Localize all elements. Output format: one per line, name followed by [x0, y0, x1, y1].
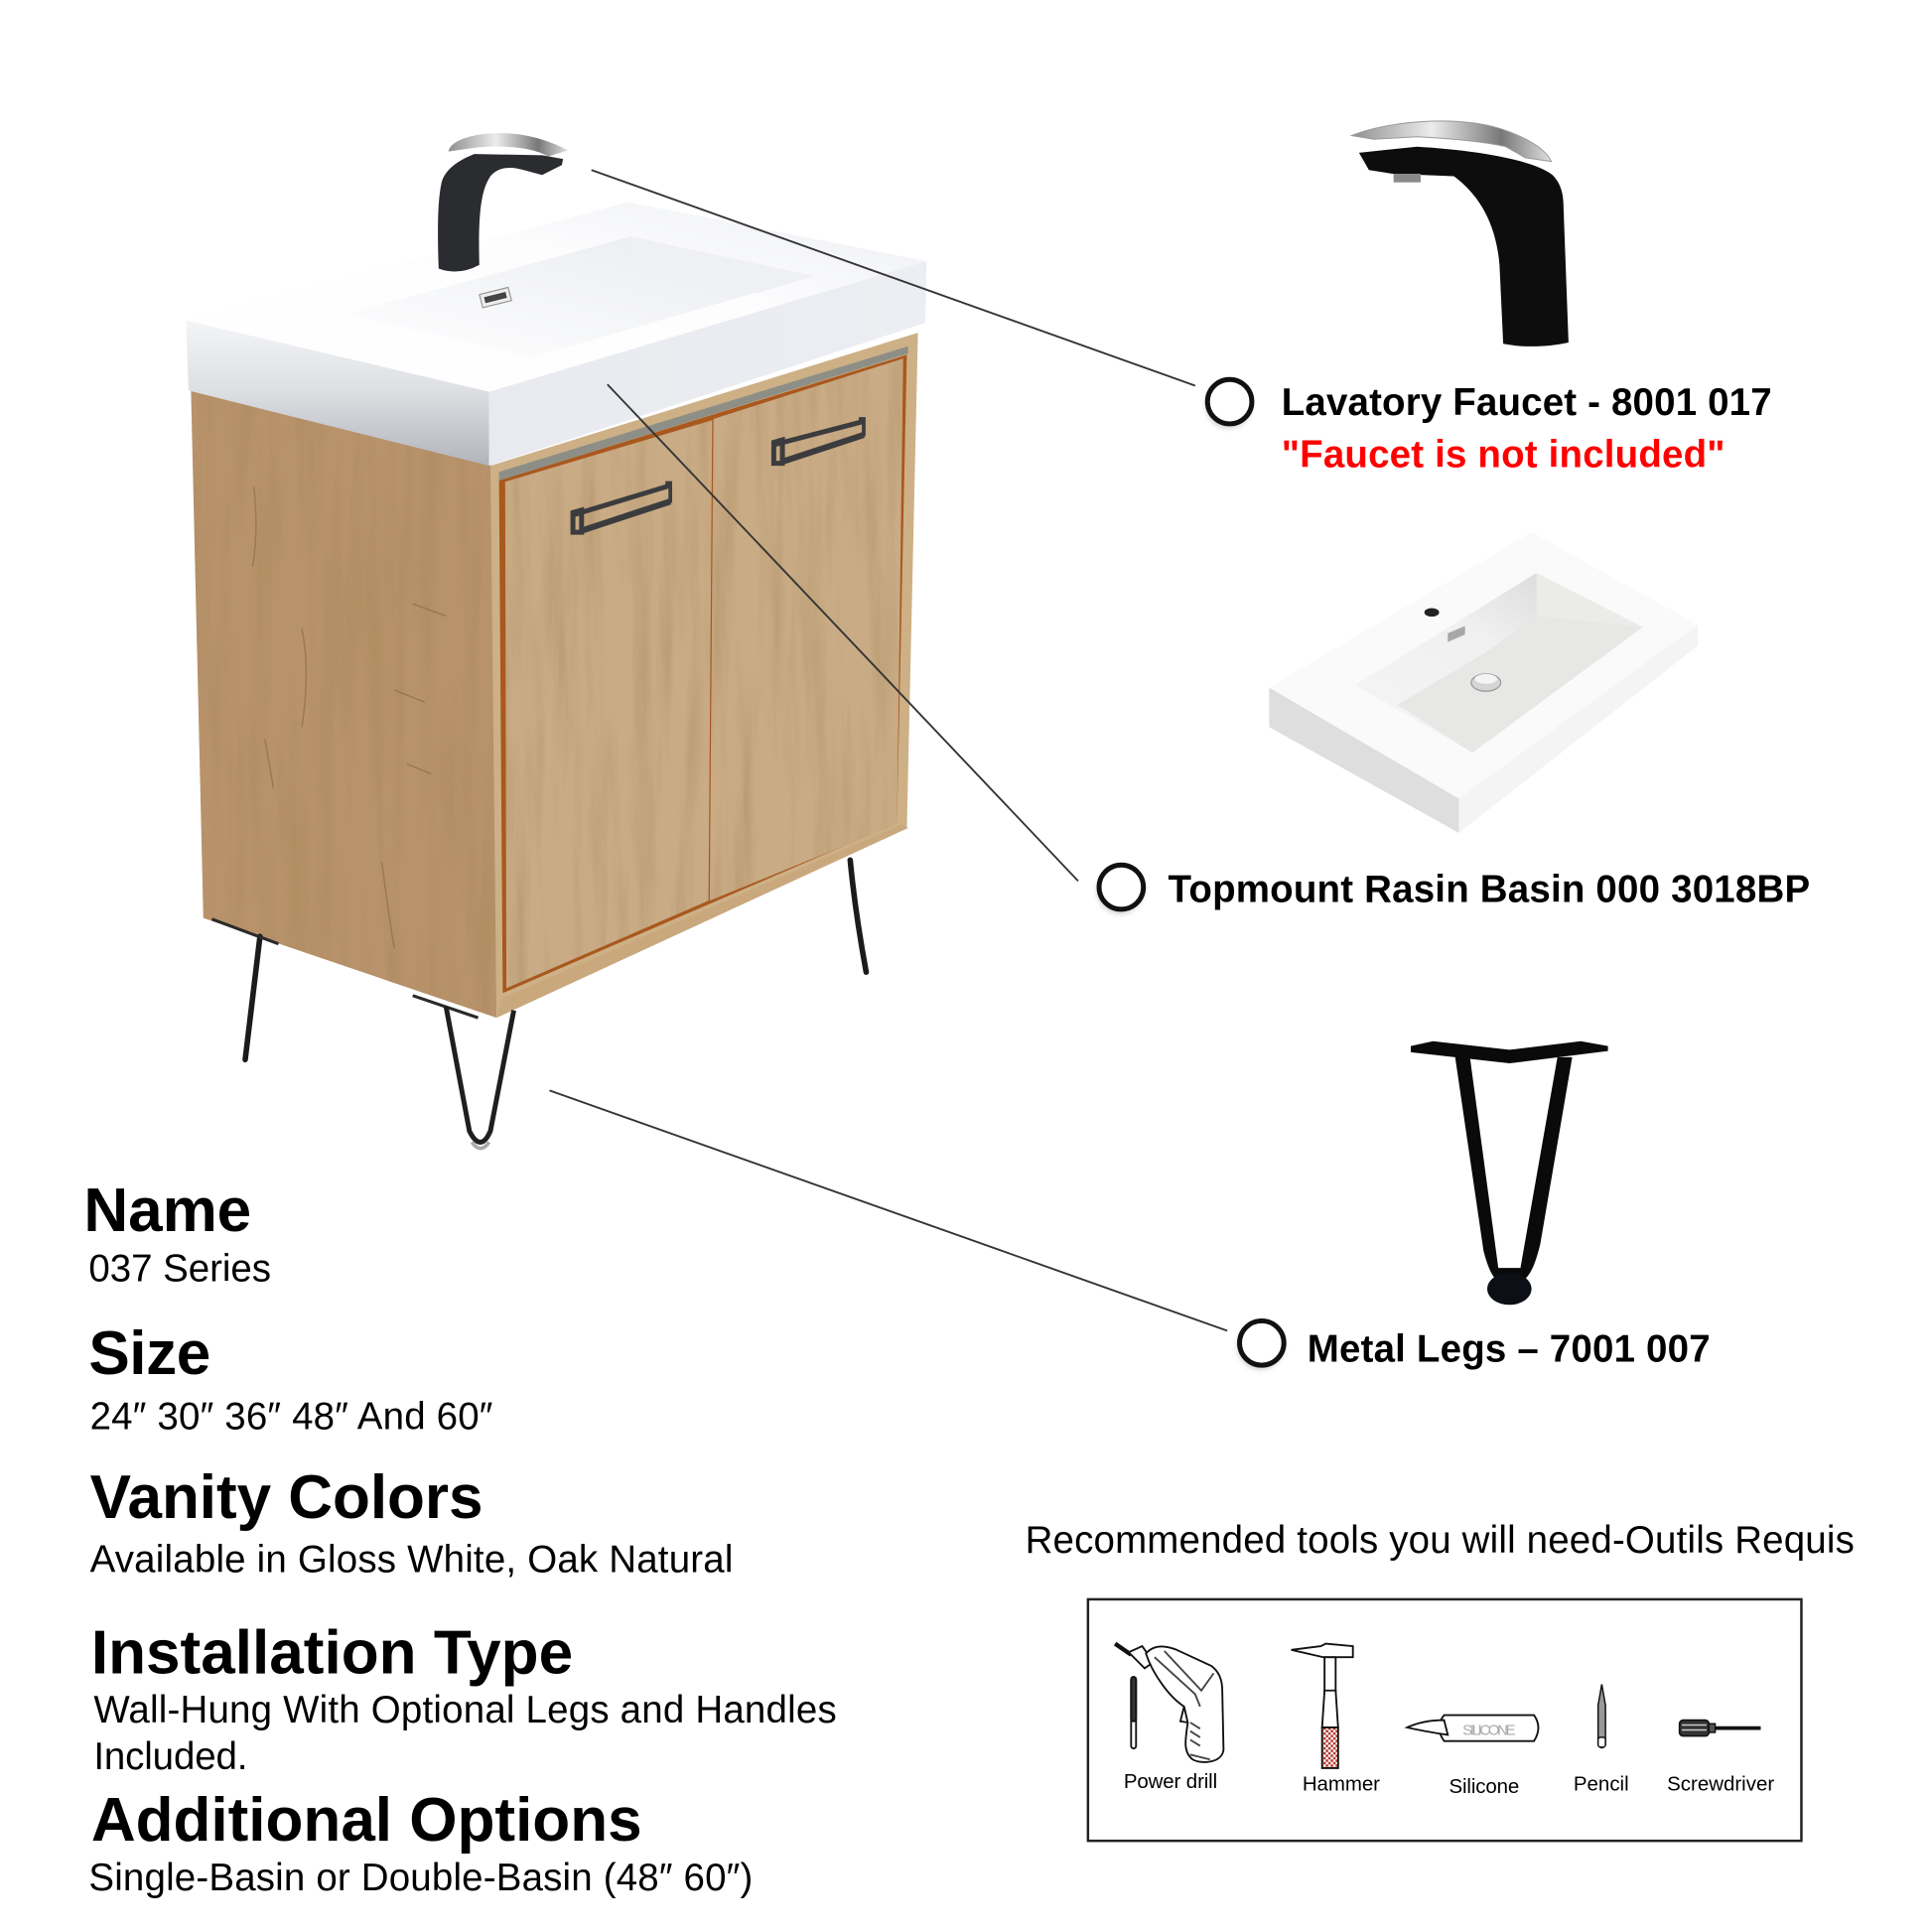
icon: hammer — [1292, 1644, 1353, 1768]
right door handle — [773, 419, 864, 464]
icon: screwdriver — [1680, 1721, 1760, 1736]
overflow slot — [480, 287, 511, 308]
callout marker: legs — [1237, 1320, 1284, 1370]
overflow — [1448, 625, 1465, 642]
heading: additional options: Additional Options — [91, 1786, 642, 1855]
mounted faucet — [438, 154, 563, 272]
front hairpin leg — [446, 1007, 514, 1142]
foot — [1487, 1273, 1532, 1305]
heading: vanity colors: Vanity Colors — [90, 1463, 483, 1532]
note: faucet not included: "Faucet is not included" — [1282, 433, 1725, 476]
label: faucet: Lavatory Faucet - 8001 017 — [1282, 381, 1772, 424]
basin front edge left — [1269, 688, 1458, 833]
back left leg — [245, 936, 260, 1059]
mounted faucet handle — [449, 133, 568, 157]
specifications text block — [83, 1176, 837, 1899]
leader line: faucet — [592, 170, 1195, 385]
cabinet underside — [211, 919, 479, 1018]
leg rods — [1455, 1057, 1573, 1287]
worktop left edge — [186, 321, 489, 466]
leader line: legs — [550, 1090, 1227, 1330]
basin top — [1269, 532, 1698, 798]
label: pencil: Pencil — [1574, 1772, 1629, 1795]
label: legs: Metal Legs – 7001 007 — [1308, 1327, 1711, 1370]
heading: installation type: Installation Type — [91, 1618, 573, 1687]
value: installation type: Wall-Hung With Optional Legs and Handles — [93, 1689, 837, 1731]
wood knots on side panel — [252, 486, 446, 949]
faucet callout image — [1351, 121, 1569, 346]
label: hammer: Hammer — [1303, 1772, 1380, 1795]
faucet chrome handle — [1351, 121, 1552, 162]
worktop right edge — [489, 261, 926, 466]
shadow strip under worktop — [499, 346, 908, 481]
value: installation type line two: Included. — [93, 1735, 247, 1778]
mounting plate — [1411, 1041, 1608, 1063]
leader line: basin — [608, 384, 1078, 881]
label: screwdriver: Screwdriver — [1667, 1772, 1774, 1795]
label: silicone: Silicone — [1449, 1775, 1519, 1798]
basin back wall — [1537, 573, 1642, 627]
recommended tools heading: Recommended tools you will need-Outils Requis — [1026, 1519, 1855, 1562]
icon: silicone tube: SILICONE — [1462, 1723, 1516, 1738]
callout marker: basin — [1097, 865, 1144, 914]
faucet aerator — [1394, 174, 1421, 183]
basin back wall — [630, 236, 813, 293]
back right leg — [850, 860, 866, 972]
callout marker: faucet — [1205, 379, 1252, 429]
label: basin: Topmount Rasin Basin 000 3018BP — [1169, 868, 1810, 910]
tools panel — [1088, 1599, 1801, 1841]
cabinet front frame — [490, 333, 918, 1018]
heading: name: Name — [83, 1176, 251, 1245]
icon: power drill — [1115, 1644, 1223, 1762]
leg chrome tip — [472, 1142, 489, 1149]
basin bowl — [346, 236, 813, 357]
door recess — [499, 354, 906, 993]
cabinet side panel — [191, 390, 496, 1018]
faucet hole — [1425, 608, 1440, 617]
basin front edge right — [1458, 624, 1698, 833]
value: name: 037 Series — [88, 1248, 271, 1291]
left door — [505, 420, 712, 988]
basin bowl — [1355, 573, 1642, 753]
bottom rail — [496, 824, 908, 1018]
left door handle — [573, 483, 670, 532]
value: size: 24″ 30″ 36″ 48″ And 60″ — [90, 1396, 492, 1439]
metal leg callout image — [1411, 1041, 1608, 1305]
basin floor — [1397, 617, 1642, 753]
drain — [1471, 674, 1501, 691]
icon: silicone tube — [1407, 1716, 1538, 1741]
value: vanity colors: Available in Gloss White, Oak Natural — [90, 1539, 733, 1582]
value: additional options: Single-Basin or Double-Basin (48″ 60″) — [88, 1857, 753, 1899]
product image: vanity cabinet with basin and faucet — [186, 133, 926, 1149]
tools frame — [1088, 1599, 1801, 1841]
basin callout image — [1269, 532, 1698, 833]
worktop top surface — [186, 203, 926, 392]
icon: pencil — [1598, 1685, 1605, 1747]
heading: size: Size — [88, 1319, 210, 1388]
faucet body — [1359, 147, 1569, 346]
right door — [710, 358, 903, 900]
label: power drill: Power drill — [1124, 1770, 1217, 1793]
